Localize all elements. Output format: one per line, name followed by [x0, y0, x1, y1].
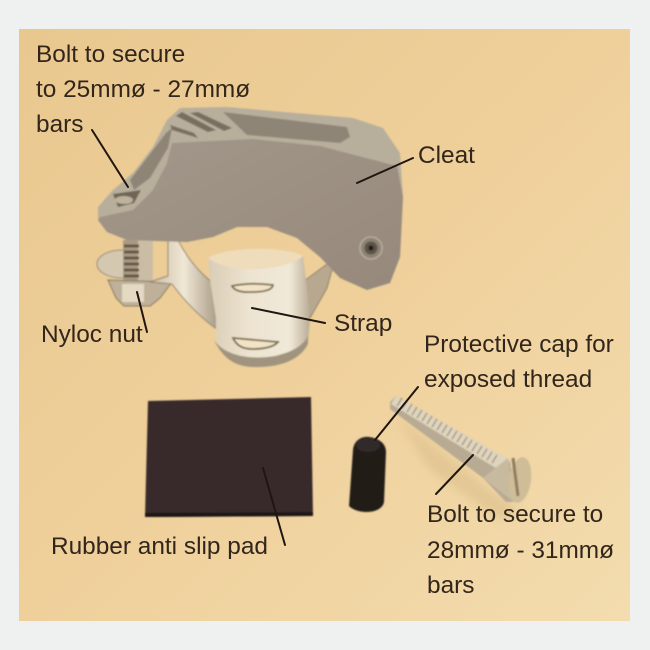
labels — [36, 41, 614, 599]
label: nyloc nut: Nyloc nut — [41, 321, 143, 348]
threaded bolt and washer — [97, 240, 172, 306]
label: protective cap: exposed thread — [424, 366, 592, 393]
cleat body — [98, 107, 403, 290]
bolt hole — [113, 190, 141, 207]
leader lines — [92, 130, 473, 545]
label: bolt 25-27mm: Bolt to secure — [36, 41, 185, 68]
label: rubber pad: Rubber anti slip pad — [51, 533, 268, 560]
protective cap — [349, 437, 386, 512]
pivot screw — [360, 237, 382, 259]
label: bolt 25-27mm: to 25mmø - 27mmø — [36, 76, 250, 103]
label: strap: Strap — [334, 310, 392, 337]
bolt shadow — [395, 415, 520, 520]
label: bolt 28-31mm: 28mmø - 31mmø — [427, 537, 614, 564]
label: bolt 28-31mm: Bolt to secure to — [427, 501, 603, 528]
label: bolt 28-31mm: bars — [427, 572, 474, 599]
countersunk bolt — [390, 396, 534, 520]
cleat assembly photo — [97, 107, 403, 367]
label: bolt 25-27mm: bars — [36, 111, 83, 138]
label: protective cap: Protective cap for — [424, 331, 614, 358]
rubber anti slip pad — [145, 397, 313, 517]
label: cleat: Cleat — [418, 142, 475, 169]
strap — [150, 238, 333, 367]
